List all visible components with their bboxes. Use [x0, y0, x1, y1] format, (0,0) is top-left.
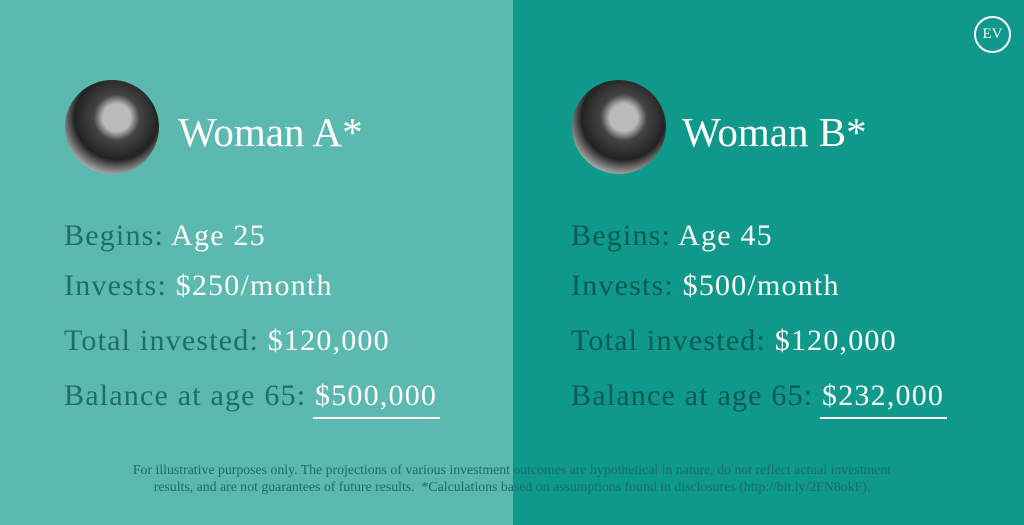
logo EV: EV: [982, 26, 1002, 42]
underline A: [313, 417, 440, 419]
row balance A: Balance at age 65: $500,000: [64, 379, 437, 412]
footnote: results, and are not guarantees of future results. *Calculations based on assumptions found in disclosures (http://bit.ly/2FN8okF).: [154, 479, 870, 494]
panel: woman B: [513, 0, 1024, 525]
photo A: [65, 80, 159, 174]
row total A: Total invested: $120,000: [64, 324, 390, 357]
row invests B: Invests: $500/month: [571, 269, 840, 302]
row total B: Total invested: $120,000: [571, 324, 897, 357]
row invests A: Invests: $250/month: [64, 269, 333, 302]
logo EV: [974, 16, 1011, 53]
footnote: [133, 462, 891, 494]
panel: woman A: [0, 0, 513, 525]
title B: Woman B*: [682, 109, 867, 155]
underline B: [820, 417, 947, 419]
row begins A: Begins: Age 25: [64, 219, 266, 252]
title A: Woman A*: [178, 109, 363, 155]
footnote: For illustrative purposes only. The projections of various investment outcomes are hypothetical in nature, do not reflect actual investment: [133, 462, 891, 477]
photo B: [572, 80, 666, 174]
row begins B: Begins: Age 45: [571, 219, 773, 252]
row balance B: Balance at age 65: $232,000: [571, 379, 944, 412]
